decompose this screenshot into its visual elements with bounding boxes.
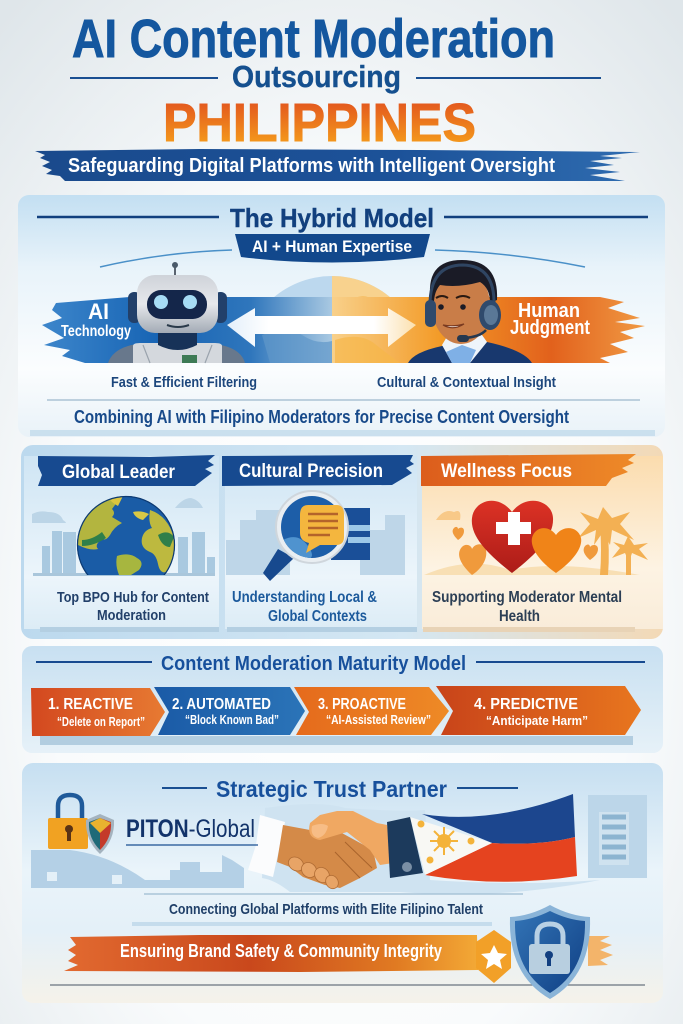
card: Global Leader <box>24 455 219 632</box>
skyline left <box>31 850 244 888</box>
step 2: automated <box>154 687 305 735</box>
icon: handshake <box>277 811 393 891</box>
tagline text: Safeguarding Digital Platforms with Intelligent Oversight <box>68 155 555 177</box>
icon: orange star badge <box>476 930 511 983</box>
ribbon: AI + Human Expertise <box>235 234 430 262</box>
step 4: predictive <box>436 686 641 735</box>
label: Human Judgment <box>510 300 590 339</box>
icon: flag of the Philippines <box>410 794 577 882</box>
panel: strategic trust partner <box>22 763 663 1003</box>
step 1: reactive <box>31 688 165 736</box>
icon: small side hearts <box>453 527 598 575</box>
title block <box>35 9 640 181</box>
label: Human Judgment: Human <box>518 300 580 322</box>
panel: three value pillars <box>21 445 663 639</box>
label: AI Technology <box>61 299 131 340</box>
icon: palm trees <box>578 507 648 575</box>
text: top BPO hub: Top BPO Hub for Content <box>57 589 209 606</box>
title: AI Content Moderation: AI Content Moderation <box>72 9 555 69</box>
card: Wellness Focus <box>421 454 663 632</box>
label: AI Technology: AI <box>88 299 109 324</box>
icon: security shield with lock <box>510 905 590 999</box>
sun <box>430 827 458 855</box>
icon: red heart with cross <box>472 501 553 573</box>
icon: colourful shield <box>86 814 114 854</box>
text: top BPO hub <box>57 589 209 624</box>
text: supporting moderator mental health <box>432 589 622 625</box>
title: PHILIPPINES: PHILIPPINES <box>163 93 476 153</box>
banner: ensuring brand safety <box>64 935 478 972</box>
icon: navy cuff <box>387 817 423 878</box>
panel: content moderation maturity model <box>22 646 663 753</box>
buildings right <box>588 795 647 878</box>
header: Cultural Precision <box>222 455 414 486</box>
statement: combining AI with Filipino moderators: Combining AI with Filipino Moderators for Precise Content Oversight <box>74 407 569 427</box>
icon: robot <box>108 262 245 363</box>
text: understanding local and global: Understanding Local & <box>232 589 377 606</box>
icon: white sleeve <box>248 815 285 877</box>
blue document panel <box>331 508 370 560</box>
step 3: proactive: “AI-Assisted Review” <box>326 713 431 727</box>
step 2: automated: “Block Known Bad” <box>185 713 279 727</box>
header: Global Leader: Global Leader <box>62 462 176 483</box>
banner: ensuring brand safety: Ensuring Brand Safety & Community Integrity <box>120 941 442 961</box>
card: Cultural Precision <box>222 455 417 632</box>
double arrow <box>227 308 416 347</box>
swoosh behind handshake <box>262 804 600 894</box>
tagline banner <box>35 149 640 181</box>
step 3: proactive <box>294 687 449 735</box>
text: supporting moderator mental health: Health <box>499 608 540 625</box>
band: human orange <box>332 297 645 363</box>
step 3: proactive: 3. PROACTIVE <box>318 696 406 713</box>
icon: orange heart <box>532 528 581 573</box>
accent strokes right of shield <box>588 936 613 966</box>
icon: magnifier with speech bubble <box>263 491 348 581</box>
header: Global Leader <box>38 455 215 486</box>
heading: Strategic Trust Partner: Strategic Trust Partner <box>216 776 447 802</box>
ribbon: AI + Human Expertise: AI + Human Expertise <box>252 237 412 256</box>
logo: PITON-Global: PITON-Global <box>126 815 255 843</box>
text: understanding local and global: Global Contexts <box>268 608 367 625</box>
caption: Fast & Efficient Filtering: Fast & Efficient Filtering <box>111 375 257 391</box>
city backdrop <box>226 510 405 575</box>
step 2: automated: 2. AUTOMATED <box>172 696 271 713</box>
caption: Cultural & Contextual Insight: Cultural & Contextual Insight <box>377 375 556 391</box>
icon: padlock <box>48 795 88 849</box>
icon: earth globe <box>76 496 176 575</box>
text: top BPO hub: Moderation <box>97 607 166 624</box>
step 1: reactive: 1. REACTIVE <box>48 696 133 713</box>
step 1: reactive: “Delete on Report” <box>57 715 145 729</box>
text: understanding local and global <box>232 589 377 625</box>
step 4: predictive: “Anticipate Harm” <box>486 714 588 728</box>
label: AI Technology: Technology <box>61 323 131 340</box>
header: Cultural Precision: Cultural Precision <box>239 461 383 482</box>
header: Wellness Focus: Wellness Focus <box>441 461 572 482</box>
step 4: predictive: 4. PREDICTIVE <box>474 696 578 713</box>
text: supporting moderator mental health: Supporting Moderator Mental <box>432 589 622 606</box>
panel: the hybrid model <box>18 195 665 456</box>
heading: maturity model: Content Moderation Maturity Model <box>161 653 466 675</box>
label: Human Judgment: Judgment <box>510 317 590 339</box>
skyline <box>42 531 215 573</box>
caption: connecting global platforms: Connecting Global Platforms with Elite Filipino Talent <box>169 901 483 918</box>
subtitle: Outsourcing: Outsourcing <box>232 59 401 94</box>
globe behind arrows <box>274 276 390 297</box>
header: Wellness Focus <box>421 454 636 486</box>
band: AI blue <box>42 297 332 363</box>
heading: The Hybrid Model: The Hybrid Model <box>230 203 434 233</box>
icon: human agent with headset <box>408 260 532 363</box>
